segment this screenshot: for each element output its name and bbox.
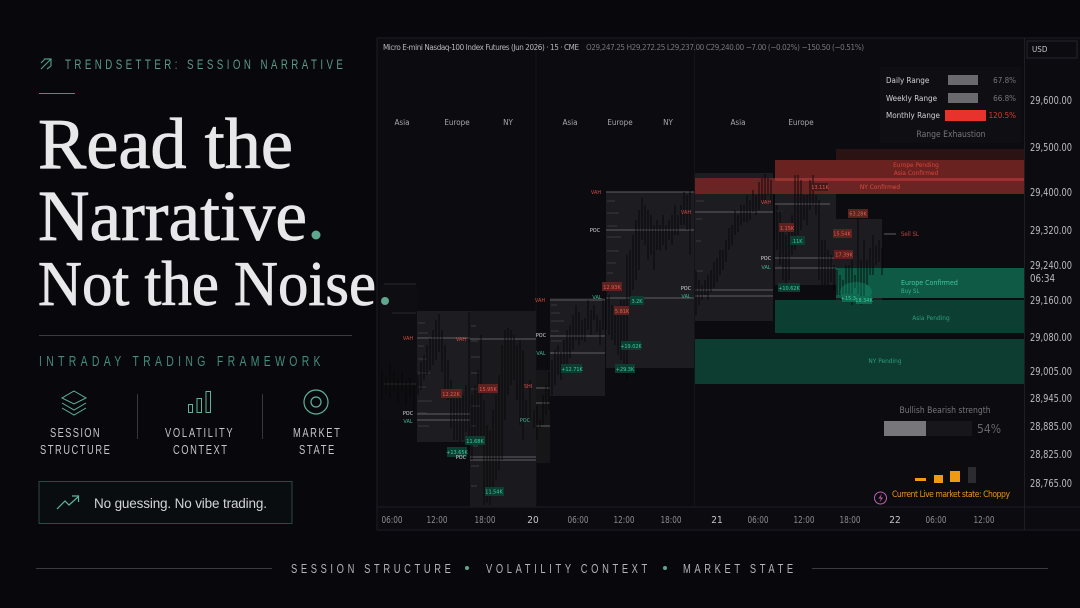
volume tags: sell: 63.28K: [849, 212, 867, 218]
current market state label: [874, 490, 1010, 504]
level labels: VAH: [681, 210, 691, 216]
session labels: NY: [663, 118, 673, 127]
level labels: POC: [403, 411, 414, 417]
volume tags: sell: [441, 183, 868, 398]
time axis: 06:00: [568, 515, 589, 526]
title: [38, 104, 389, 319]
level labels: POC: [590, 228, 601, 234]
footer strip: MARKET STATE: [683, 563, 794, 576]
level labels: VAH: [591, 190, 601, 196]
volume tags: sell: 12.93K: [603, 285, 621, 291]
price axis: [1030, 94, 1072, 490]
framework item: market state: STATE: [299, 444, 335, 457]
price axis: 29,500.00: [1030, 141, 1072, 154]
volume tags: buy: 18.34K: [855, 298, 873, 304]
price axis: 28,825.00: [1030, 448, 1072, 461]
range exhaustion panel: Daily Range: [886, 76, 930, 85]
range exhaustion panel: 120.5%: [989, 111, 1016, 120]
volume tags: sell: 12.22K: [442, 392, 460, 398]
level labels: SHI: [524, 384, 532, 390]
session labels: Asia: [394, 118, 410, 127]
price zone: Asia Pending: [775, 300, 1024, 333]
price zone: Europe Confirmed: Europe Confirmed: [901, 279, 958, 287]
session labels: Europe: [444, 118, 470, 127]
volume tags: sell: 15.95K: [479, 387, 497, 393]
title: Read the: [38, 104, 293, 184]
volume profile ticks: [418, 168, 784, 487]
icon: target: [304, 390, 328, 414]
volume tags: sell: 17.39K: [835, 252, 853, 258]
level labels: POC: [520, 418, 531, 424]
range exhaustion panel: 66.8%: [993, 94, 1016, 103]
level labels: VAL: [403, 419, 413, 425]
volume tags: buy: +29.3K: [616, 367, 635, 373]
framework item: session structure: SESSION: [50, 427, 100, 440]
session labels: Europe: [607, 118, 633, 127]
price zone: Europe Confirmed: [836, 268, 1024, 298]
price zone: NY Confirmed: NY Confirmed: [860, 183, 900, 191]
level labels: POC: [761, 256, 772, 262]
icon: trending line: [57, 496, 78, 509]
volume tags: buy: 11.68K: [466, 439, 484, 445]
level labels: POC: [536, 333, 547, 339]
session labels: Asia: [730, 118, 746, 127]
icon: volatility bars: [188, 392, 210, 412]
volume tags: buy: [446, 236, 873, 496]
volume tags: sell: 15.54K: [833, 232, 851, 238]
level labels: VAH: [535, 298, 545, 304]
price axis: 28,945.00: [1030, 392, 1072, 405]
price axis: 06:34: [1030, 272, 1055, 285]
chart header: instrument and OHLC: O29,247.25 H29,272.25 L29,237.00 C29,240.00 −7.00 (−0.02%) −150.50 (−0.51%): [586, 43, 864, 52]
level labels: VAH: [403, 336, 413, 342]
price zone: NY Pending: NY Pending: [868, 357, 902, 365]
volume tags: buy: 3.2K: [631, 299, 643, 305]
volume tags: sell: 5.81K: [615, 309, 630, 315]
time axis: 22: [889, 515, 901, 526]
range exhaustion panel: [880, 67, 1021, 143]
level labels: VAH: [456, 337, 466, 343]
range exhaustion panel: 67.8%: [993, 76, 1016, 85]
callout: No guessing. No vibe trading.: [94, 496, 267, 511]
panel: trading chart: [377, 38, 1080, 530]
time axis: 21: [711, 515, 723, 526]
level labels: Sell SL: [901, 231, 919, 238]
volume tags: buy: +15.3K: [841, 296, 860, 302]
time axis: 12:00: [974, 515, 995, 526]
level labels: VAL: [592, 295, 602, 301]
framework item: session structure: STRUCTURE: [40, 444, 110, 457]
bullish bearish strength meter: 54%: [977, 422, 1001, 436]
volume tags: buy: 11.54K: [485, 490, 503, 496]
framework item: market state: MARKET: [293, 427, 340, 440]
time axis: 20: [527, 515, 539, 526]
chart header: instrument and OHLC: [383, 43, 864, 52]
session labels: [394, 118, 814, 127]
price zone: Europe Pending / Asia Confirmed: Asia Confirmed: [894, 169, 939, 177]
framework item: market state: [293, 390, 340, 457]
framework item: session structure: [40, 391, 110, 457]
time axis: 06:00: [748, 515, 769, 526]
time axis: 06:00: [382, 515, 403, 526]
currency selector: [1027, 41, 1077, 58]
range exhaustion panel: Range Exhaustion: [916, 130, 986, 140]
volume tags: buy: +19.02K: [620, 344, 643, 350]
price axis: 28,885.00: [1030, 420, 1072, 433]
volume tags: sell: 1.15K: [780, 226, 795, 232]
level labels: VAH: [761, 200, 771, 206]
session labels: NY: [503, 118, 513, 127]
price axis: 29,005.00: [1030, 365, 1072, 378]
price zone: NY Pending: [695, 339, 1024, 384]
key level lines: VAH POC VAL: [417, 190, 896, 460]
current market state label: Current Live market state: Choppy: [892, 490, 1010, 500]
bullish bearish strength meter: [884, 406, 1001, 436]
volume tags: sell: 13.11K: [811, 185, 829, 191]
glow at Europe Confirmed lows: [840, 282, 872, 302]
time axis: 12:00: [614, 515, 635, 526]
price zone: NY Confirmed: [695, 178, 1024, 194]
footer strip: SESSION STRUCTURE: [291, 563, 451, 576]
time axis: 12:00: [426, 515, 448, 526]
brand row: [41, 58, 343, 72]
level labels: VAL: [536, 351, 546, 357]
price zone: Europe pending upper band: [836, 149, 1024, 160]
framework item: volatility context: VOLATILITY: [165, 427, 233, 440]
volume tags: buy: .11K: [791, 239, 803, 245]
framework item: volatility context: [165, 392, 233, 457]
price axis: 29,160.00: [1030, 294, 1072, 307]
footer strip: VOLATILITY CONTEXT: [486, 563, 647, 576]
time axis: 18:00: [474, 515, 496, 526]
price axis: 28,765.00: [1030, 477, 1072, 490]
time axis: [382, 515, 995, 526]
level labels: POC: [456, 455, 467, 461]
session labels: Europe: [788, 118, 814, 127]
currency selector: USD: [1032, 45, 1048, 54]
subtitle: INTRADAY TRADING FRAMEWORK: [39, 353, 321, 369]
title: Not the Noise: [38, 249, 376, 319]
price axis: 29,240.00: [1030, 259, 1072, 272]
framework item: volatility context: CONTEXT: [173, 444, 227, 457]
volume tags: buy: +10.62K: [778, 286, 801, 292]
chart header: instrument and OHLC: Micro E-mini Nasdaq-100 Index Futures (Jun 2026) · 15 · CME: [383, 43, 579, 52]
time axis: 12:00: [794, 515, 815, 526]
bullish bearish strength meter: Bullish Bearish strength: [899, 406, 991, 416]
title: Narrative: [38, 176, 307, 256]
range exhaustion panel: Monthly Range: [886, 111, 940, 120]
footer strip: [36, 563, 1048, 576]
range exhaustion panel: Weekly Range: [886, 94, 938, 103]
price zone: Europe Pending / Asia Confirmed: [775, 160, 1024, 181]
price zone: Asia Pending: Asia Pending: [912, 314, 950, 322]
callout: [39, 482, 292, 524]
time axis: 18:00: [660, 515, 682, 526]
brand label: TRENDSETTER: SESSION NARRATIVE: [65, 58, 343, 72]
faint levels in first session: [384, 284, 416, 384]
price axis: 29,080.00: [1030, 331, 1072, 344]
price zone: Europe Pending / Asia Confirmed: Europe Pending: [893, 161, 939, 169]
volume tags: buy: +12.71K: [561, 367, 584, 373]
time axis: 18:00: [840, 515, 861, 526]
level labels: Buy SL: [901, 288, 919, 295]
session range boxes: [380, 160, 882, 507]
price axis: 29,400.00: [1030, 186, 1072, 199]
candlestick price series: [382, 174, 882, 505]
price axis: 29,600.00: [1030, 94, 1072, 107]
session labels: Asia: [562, 118, 578, 127]
icon: trend arrow logo: [41, 59, 51, 69]
market state step bars: [915, 467, 976, 483]
price axis: 29,320.00: [1030, 224, 1072, 237]
volume tags: buy: +13.65K: [446, 450, 469, 456]
icon: stacked layers: [62, 391, 86, 415]
level labels: VAL: [761, 265, 771, 271]
time axis: 06:00: [926, 515, 947, 526]
level labels: POC: [681, 286, 692, 292]
level labels: VAL: [681, 294, 691, 300]
level labels: [403, 190, 919, 461]
